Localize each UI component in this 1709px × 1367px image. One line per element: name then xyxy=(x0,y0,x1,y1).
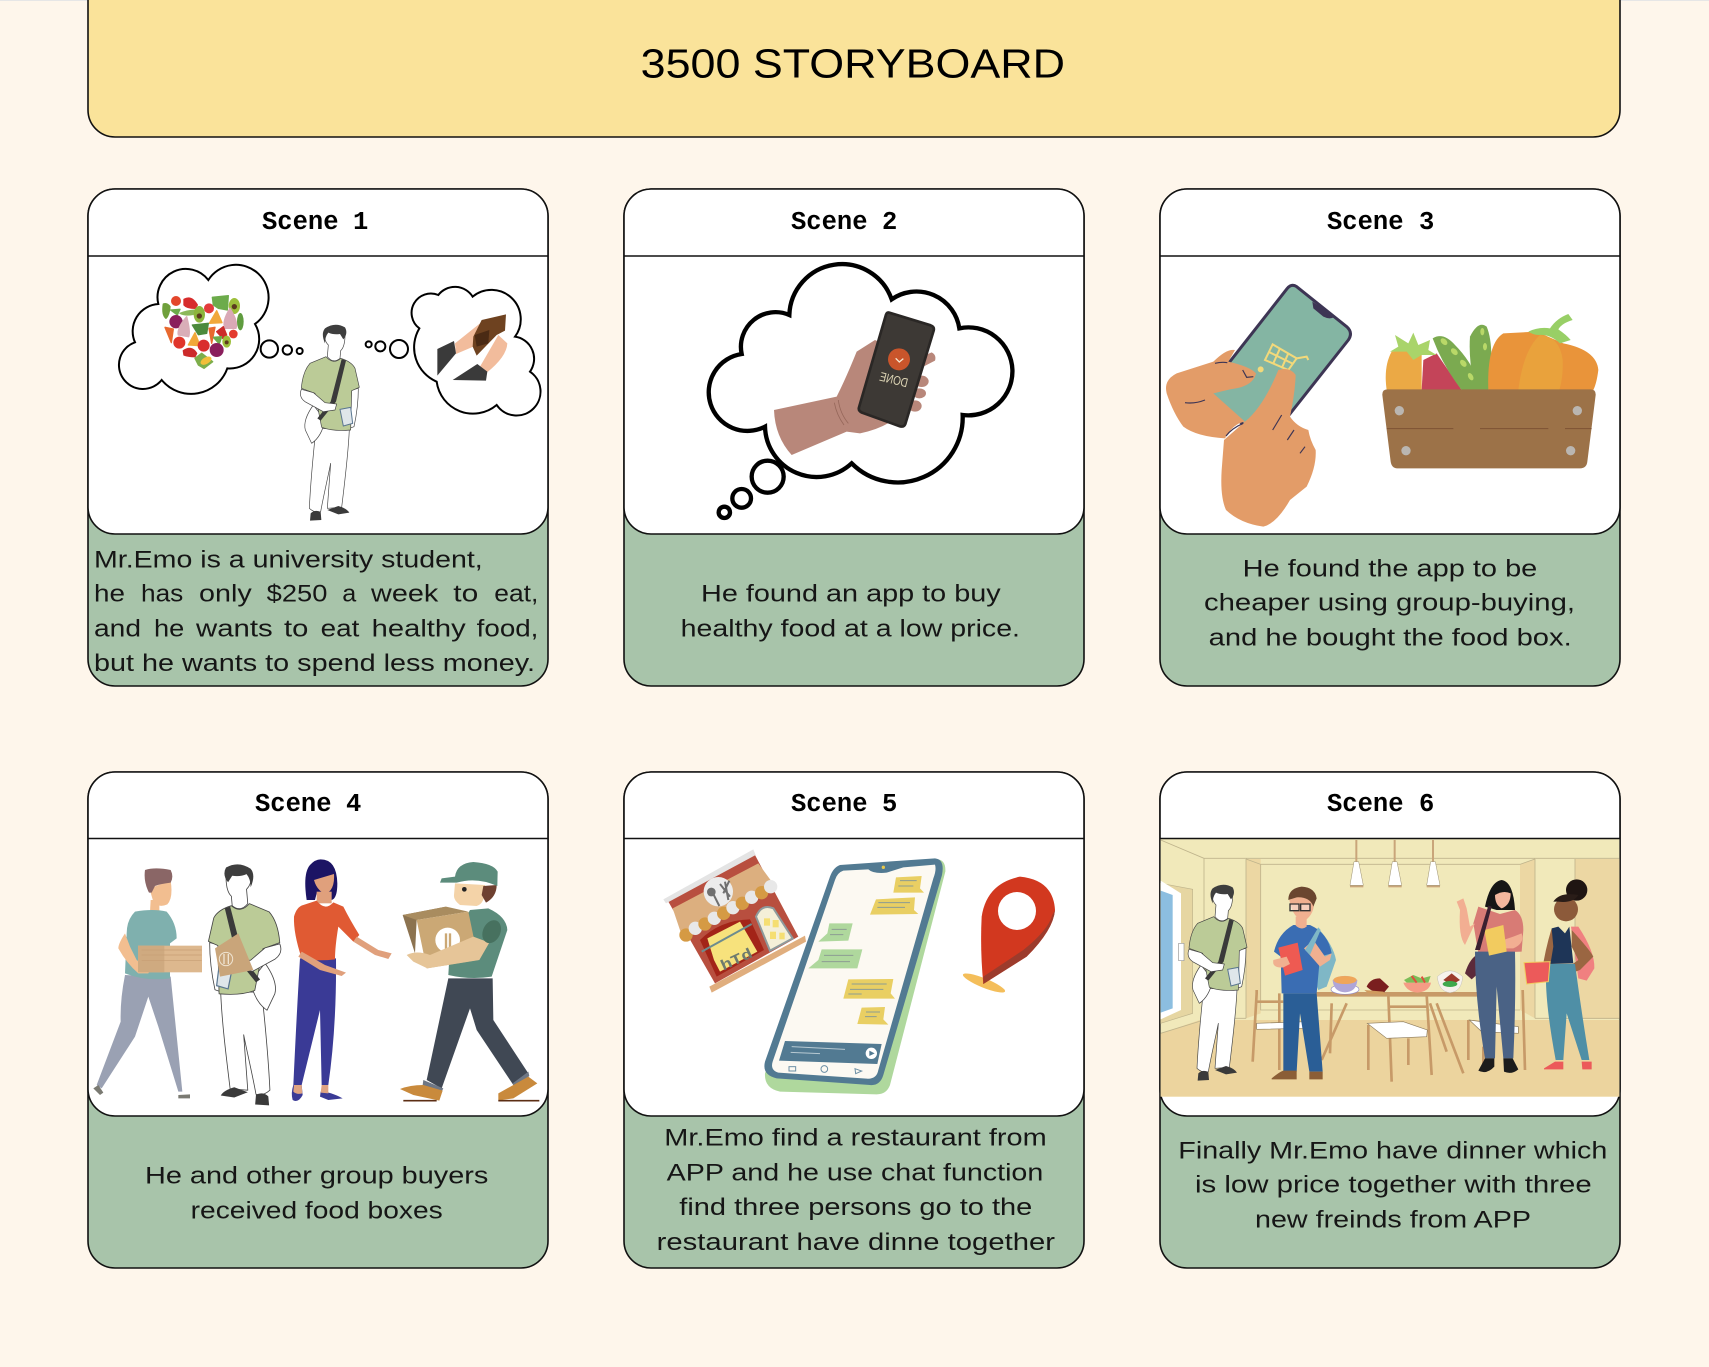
panel: scene 3 xyxy=(1160,189,1620,686)
heading: scene 2: 2 xyxy=(882,208,897,237)
icon: phone showing done xyxy=(859,313,934,427)
illustration: ordering food box on phone xyxy=(1166,285,1598,527)
title banner xyxy=(88,0,1620,137)
figure: student xyxy=(300,325,359,521)
illustration: thought of phone app xyxy=(709,264,1012,518)
figure: man in blue with backpack xyxy=(1272,887,1336,1079)
illustration: student thinking about food and money xyxy=(119,265,541,521)
caption: scene 3: and he bought the food box. xyxy=(1209,624,1572,651)
caption: scene 1: food, xyxy=(477,616,538,643)
heading: scene 5: Scene xyxy=(791,790,868,819)
dining table and chairs xyxy=(1253,990,1525,1082)
heading: scene 6: 6 xyxy=(1419,790,1434,819)
caption: scene 1: $250 xyxy=(267,581,327,608)
caption: scene 1: eat xyxy=(321,616,360,643)
icon: heart of vegetables xyxy=(163,296,244,368)
caption: scene 1: a xyxy=(342,581,357,608)
panel: scene 2 xyxy=(624,189,1084,686)
caption: scene 5: APP and he use chat function xyxy=(667,1160,1043,1187)
caption: scene 1: week xyxy=(370,581,439,608)
panel: scene 5 xyxy=(624,772,1084,1268)
dishes of food xyxy=(1331,971,1463,995)
heading: scene 3: 3 xyxy=(1419,208,1434,237)
dining room background xyxy=(1161,838,1619,1097)
heading: scene 2: Scene xyxy=(791,208,868,237)
caption: scene 4 xyxy=(145,1163,488,1224)
icon: restaurant building xyxy=(663,849,806,993)
thought cloud: healthy food xyxy=(119,265,303,394)
panel: scene 4 xyxy=(88,772,548,1268)
icon: location pin xyxy=(961,877,1055,996)
caption: scene 1: eat, xyxy=(494,581,538,608)
caption: scene 6: Finally Mr.Emo have dinner which xyxy=(1178,1137,1607,1164)
figure: delivery man with box xyxy=(400,862,539,1101)
heading: scene 3: Scene xyxy=(1327,208,1404,237)
figure: student xyxy=(1188,885,1247,1081)
caption: scene 5: Mr.Emo find a restaurant from xyxy=(664,1125,1047,1152)
figure: woman in orange xyxy=(292,859,392,1101)
caption: scene 2: He found an app to buy xyxy=(701,581,1002,608)
heading: scene 6: Scene xyxy=(1327,790,1404,819)
caption: scene 1: and xyxy=(94,616,141,643)
caption: scene 1: has xyxy=(141,581,183,608)
thought cloud: empty wallet xyxy=(366,287,541,416)
thought cloud xyxy=(709,264,1012,518)
caption: scene 6 xyxy=(1178,1137,1607,1233)
heading: scene 1: Scene xyxy=(262,208,339,237)
icon: hands xyxy=(1166,350,1316,527)
caption: scene 2 xyxy=(681,581,1020,643)
heading: scene 4: Scene xyxy=(255,790,332,819)
caption: scene 3: cheaper using group-buying, xyxy=(1204,590,1575,617)
caption: scene 4: received food boxes xyxy=(191,1197,443,1224)
panel: scene 6 xyxy=(1160,772,1620,1268)
caption: scene 5: find three persons go to the xyxy=(679,1194,1032,1221)
caption: scene 1: Mr.Emo is a university student, xyxy=(94,547,483,574)
caption: scene 1: but he wants to spend less money. xyxy=(94,650,535,677)
icon: phone with cart xyxy=(1205,285,1350,443)
figure: man carrying flat box xyxy=(93,868,202,1098)
illustration: dinner with new friends xyxy=(1161,838,1619,1097)
figure: woman in pink shirt xyxy=(1457,880,1523,1073)
icon: vegetables xyxy=(1386,314,1598,390)
illustration: restaurant, chat app and location pin xyxy=(663,849,1055,1094)
icon: hands opening wallet xyxy=(437,314,507,381)
caption: scene 1: to xyxy=(453,581,478,608)
title: 3500 STORYBOARD xyxy=(641,41,1065,87)
caption: scene 1: he xyxy=(94,581,125,608)
caption: scene 1: wants xyxy=(195,616,273,643)
heading: scene 1: 1 xyxy=(353,208,368,237)
caption: scene 5: restaurant have dinne together xyxy=(657,1229,1055,1256)
caption: scene 6: new freinds from APP xyxy=(1255,1206,1531,1233)
icon: phone with chat bubbles xyxy=(764,858,945,1094)
pendant lamps xyxy=(1350,840,1440,887)
caption: scene 2: healthy food at a low price. xyxy=(681,616,1020,643)
heading: scene 4: 4 xyxy=(346,790,361,819)
caption: scene 5 xyxy=(657,1125,1055,1256)
caption: scene 4: He and other group buyers xyxy=(145,1163,488,1190)
heading: scene 5: 5 xyxy=(882,790,897,819)
caption: scene 1 xyxy=(94,547,538,677)
panel: scene 1 xyxy=(88,189,548,686)
icon: phone showing done: DONE xyxy=(878,370,909,390)
caption: scene 1: only xyxy=(199,581,253,608)
illustration: group buyers receive boxes xyxy=(93,859,539,1105)
icon: restaurant building: hTd xyxy=(719,947,756,975)
figure: woman in navy top xyxy=(1524,879,1594,1069)
caption: scene 3: He found the app to be xyxy=(1243,556,1537,583)
icon: hand xyxy=(774,340,935,455)
icon: wooden crate xyxy=(1382,389,1596,468)
figure: student with food bag xyxy=(208,864,281,1105)
caption: scene 6: is low price together with three xyxy=(1195,1172,1592,1199)
caption: scene 1: healthy xyxy=(372,616,467,643)
caption: scene 1: he xyxy=(154,616,184,643)
caption: scene 3 xyxy=(1204,556,1575,651)
caption: scene 1: to xyxy=(284,616,308,643)
